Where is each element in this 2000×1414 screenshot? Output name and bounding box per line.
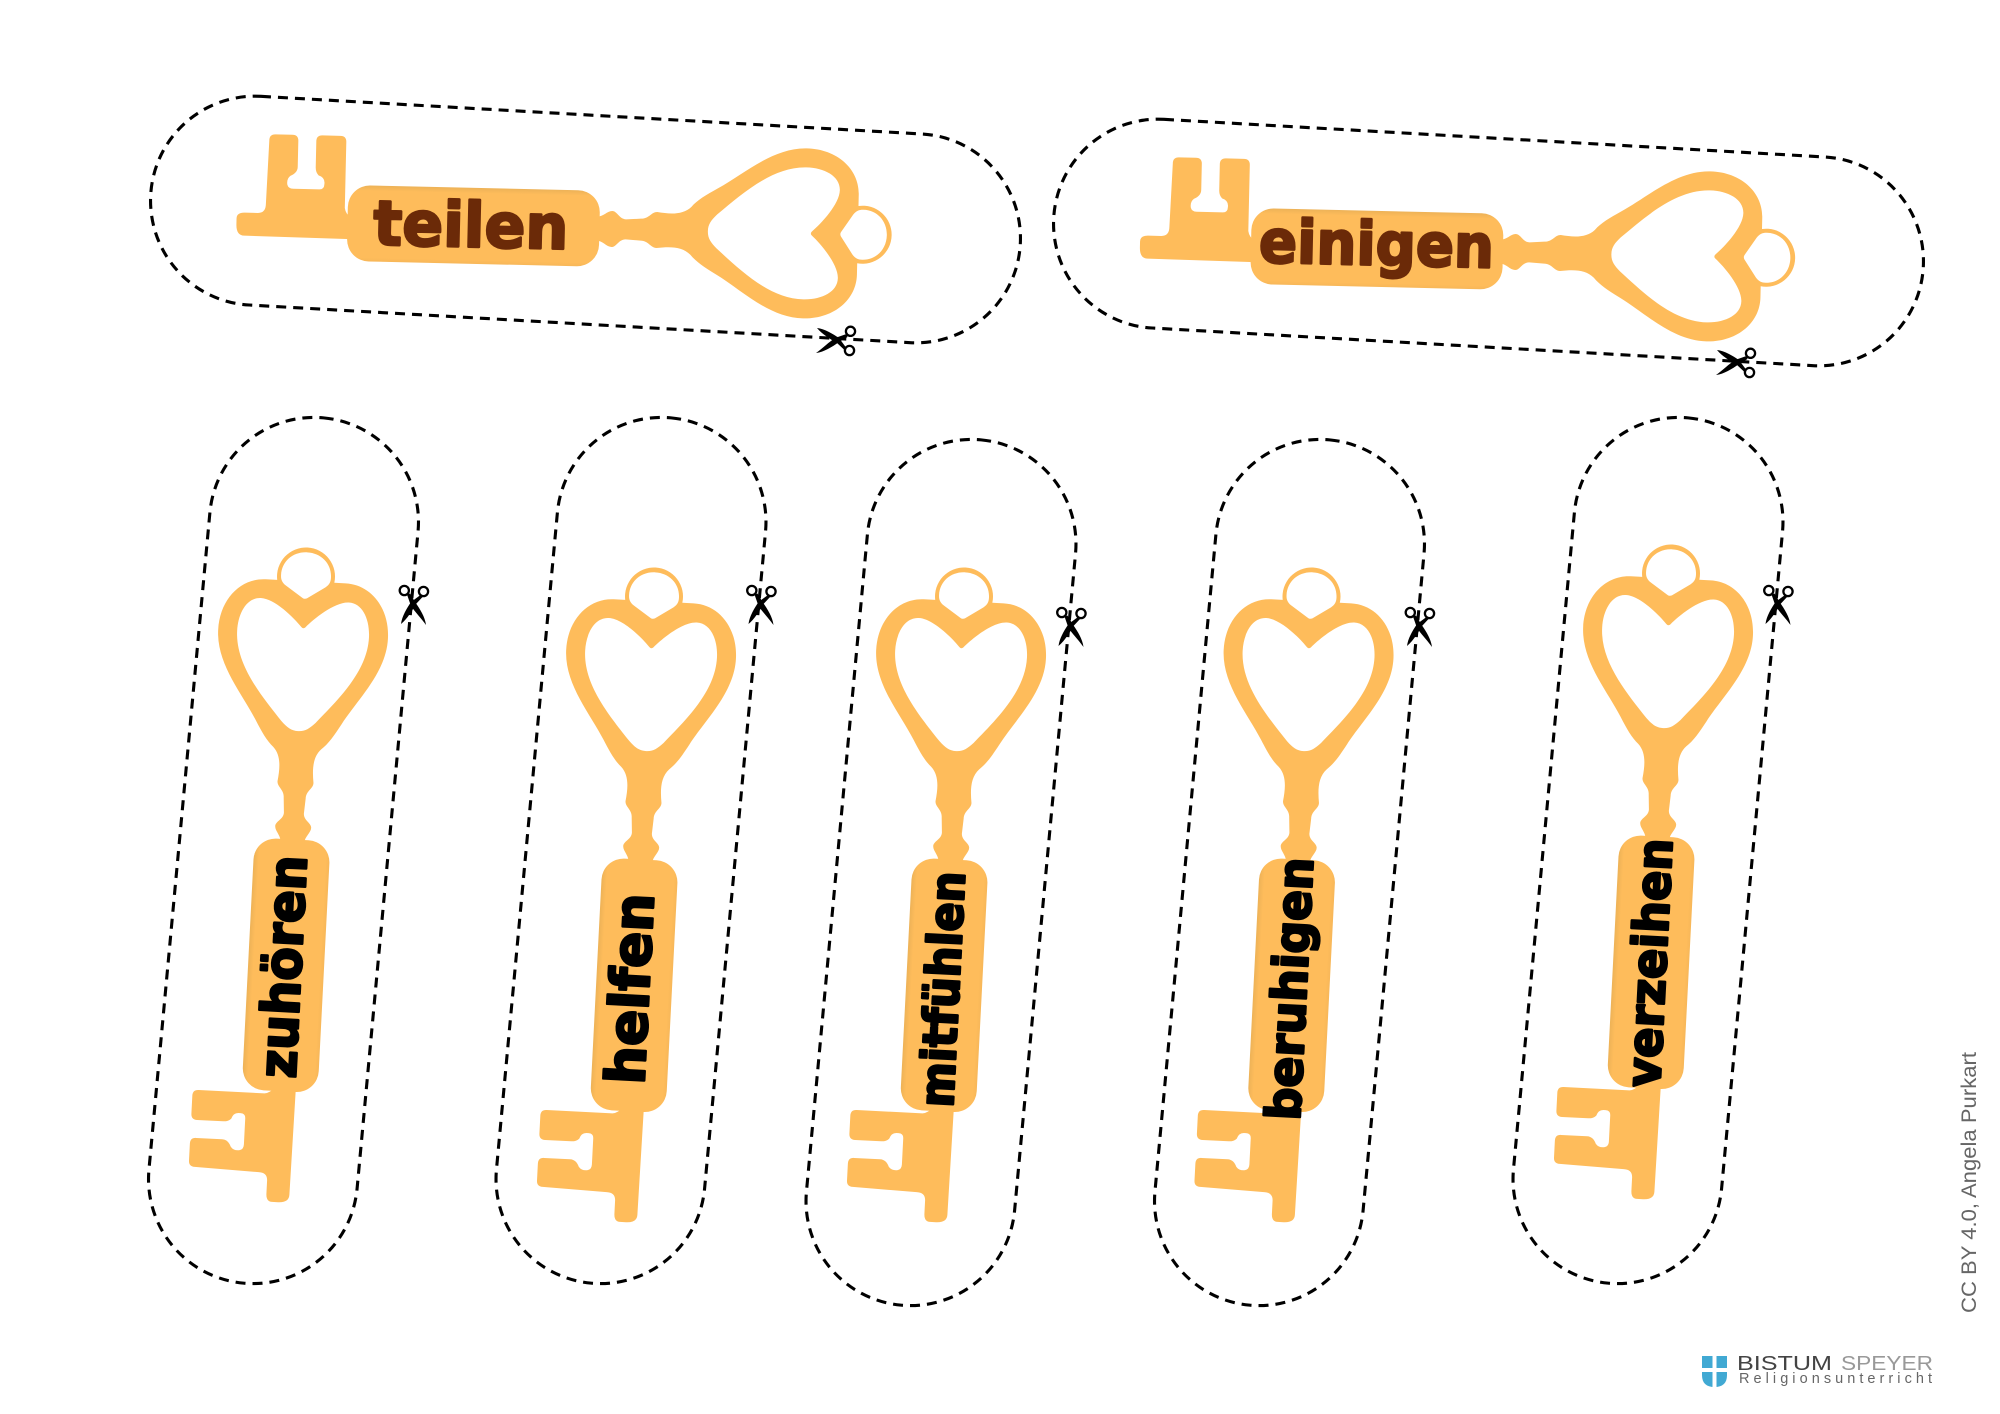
key: einigen <box>1138 157 1797 343</box>
logo subtitle: Religionsunterricht <box>1739 1371 1932 1387</box>
key: zuhören <box>187 543 392 1206</box>
dashed cut line: teilen <box>145 90 1026 349</box>
dashed cut line: beruhigen <box>1145 430 1434 1315</box>
logo wordmark light: SPEYER <box>1841 1353 1933 1375</box>
key: teilen: teilen <box>373 187 569 264</box>
icon: scissors <box>1764 586 1793 625</box>
dashed cut line: einigen <box>1048 113 1929 372</box>
icon: scissors <box>816 327 855 355</box>
cut-out card: mitfühlen <box>797 430 1086 1315</box>
dashed cut line: zuhören <box>139 408 428 1293</box>
icon: shield <box>1702 1356 1727 1387</box>
key: verzeihen: verzeihen <box>1616 837 1684 1089</box>
cut-out card: helfen <box>487 408 776 1293</box>
logo: Bistum Speyer <box>1702 1353 1933 1387</box>
key: helfen <box>535 563 740 1226</box>
key: verzeihen <box>1552 540 1757 1203</box>
key: helfen: helfen <box>594 892 667 1086</box>
dashed cut line: helfen <box>487 408 775 1293</box>
icon: scissors <box>747 586 776 625</box>
cut-out card: verzeihen <box>1504 408 1793 1293</box>
icon: scissors <box>1716 349 1755 377</box>
cut-out card: beruhigen <box>1145 430 1434 1315</box>
key: zuhören: zuhören <box>248 854 320 1080</box>
logo wordmark: BISTUM <box>1737 1353 1832 1375</box>
key: einigen: einigen <box>1258 207 1495 283</box>
icon: scissors <box>1057 608 1086 647</box>
dashed cut line: mitfühlen <box>797 430 1085 1315</box>
cut-out card: einigen <box>1048 113 1929 377</box>
key: beruhigen: beruhigen <box>1256 856 1325 1122</box>
icon: scissors <box>1406 608 1434 647</box>
credit text: CC BY 4.0, Angela Purkart <box>1958 1052 1981 1313</box>
cut-out card: teilen <box>145 90 1026 355</box>
key: mitfühlen <box>845 563 1050 1226</box>
key: beruhigen <box>1193 563 1398 1226</box>
dashed cut line: verzeihen <box>1504 408 1792 1293</box>
key: teilen <box>235 134 894 320</box>
key: mitfühlen: mitfühlen <box>910 870 977 1109</box>
icon: scissors <box>400 586 428 625</box>
cut-out card: zuhören <box>139 408 428 1293</box>
